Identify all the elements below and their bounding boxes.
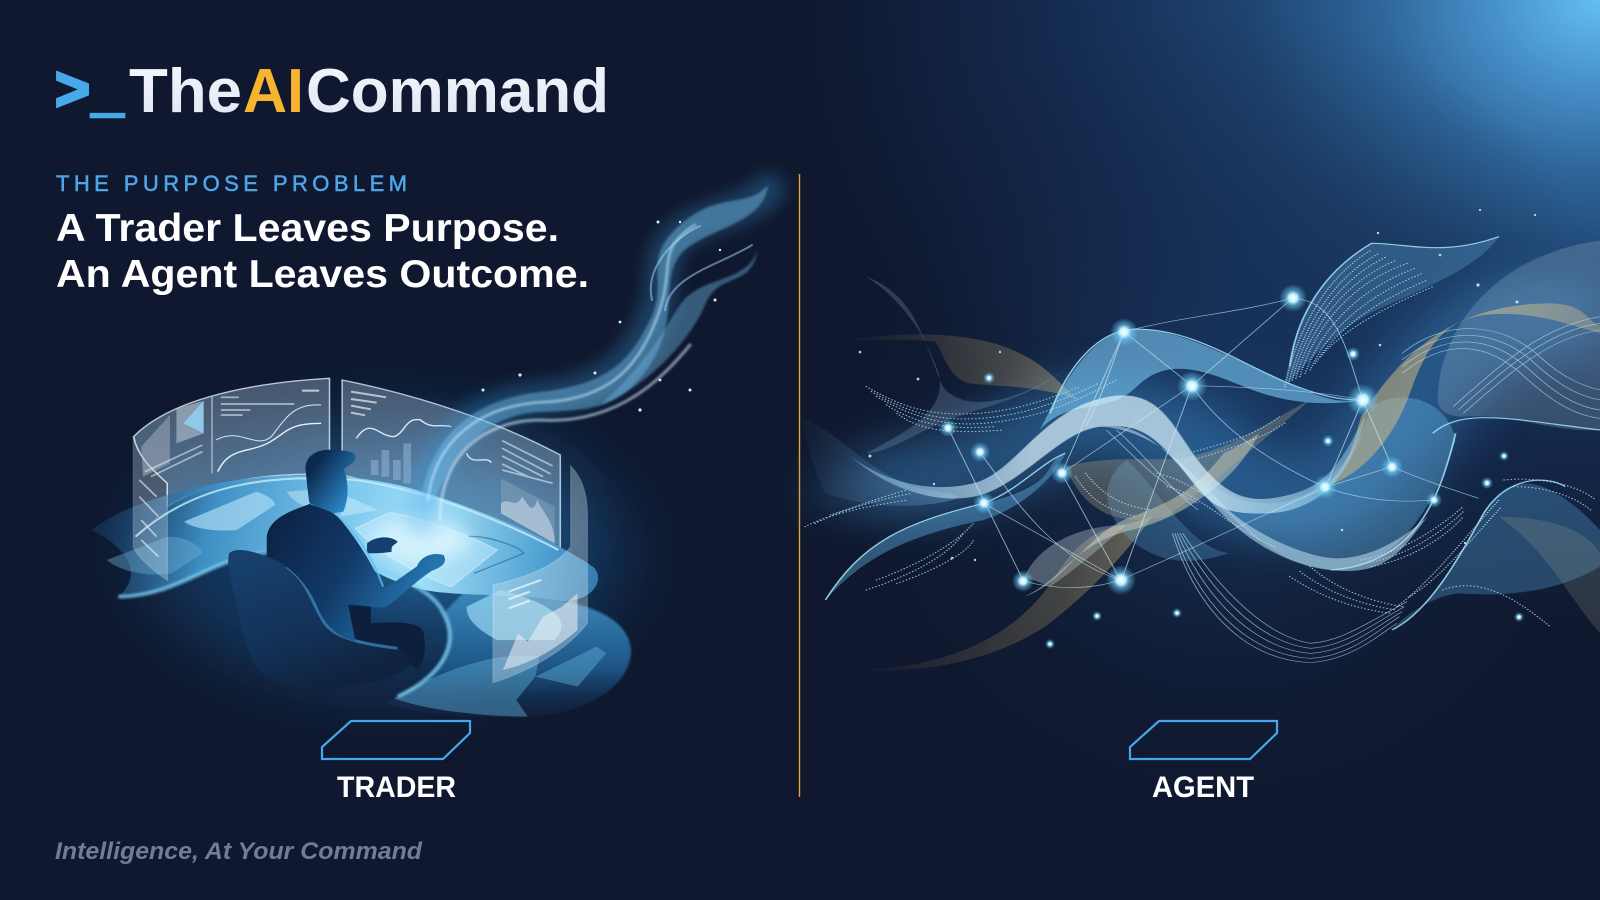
agent illustration <box>800 209 1600 670</box>
headline: An Agent Leaves Outcome. <box>56 253 589 296</box>
translucent ribbons <box>866 277 1065 453</box>
wave edge highlights <box>826 237 1600 630</box>
main white ribbon <box>851 395 1366 514</box>
legs <box>321 603 425 668</box>
agent waves <box>800 237 1600 670</box>
divider <box>798 174 800 797</box>
headline <box>56 207 589 296</box>
agent label <box>1130 721 1277 804</box>
fine line families <box>1106 317 1600 663</box>
chair seat edge <box>287 567 398 648</box>
chair <box>228 550 412 687</box>
logo wordmark: AI <box>243 57 304 126</box>
lower desk <box>386 593 631 718</box>
logo wordmark: The <box>129 57 242 126</box>
agent label plate <box>1130 721 1277 759</box>
agent label text: AGENT <box>1152 771 1254 804</box>
trader illustration <box>91 185 768 718</box>
soft glow under waves <box>851 309 1600 503</box>
front right screen <box>493 467 587 682</box>
logo prompt symbol: _ <box>91 64 124 122</box>
raised hand <box>367 537 398 553</box>
center panel <box>342 380 560 550</box>
trader scene <box>91 378 631 718</box>
trader label text: TRADER <box>337 771 456 804</box>
footer tagline: Intelligence, At Your Command <box>55 838 423 865</box>
purpose smoke <box>420 185 768 520</box>
dotted wave meshes <box>805 250 1596 627</box>
left panel <box>134 378 330 507</box>
logo prompt symbol <box>55 55 124 124</box>
logo wordmark: Command <box>306 57 609 126</box>
desk surface <box>91 475 598 601</box>
logo prompt symbol: > <box>55 55 90 124</box>
head <box>305 450 356 513</box>
trader label <box>322 721 470 804</box>
eyebrow heading: THE PURPOSE PROBLEM <box>56 171 407 196</box>
network links <box>948 298 1479 588</box>
man silhouette <box>267 504 445 642</box>
front left screen strip <box>134 437 167 580</box>
network nodes <box>859 209 1536 649</box>
headline: A Trader Leaves Purpose. <box>56 207 559 250</box>
desk pads <box>184 492 275 531</box>
logo <box>55 55 609 126</box>
trader label plate <box>322 721 470 759</box>
